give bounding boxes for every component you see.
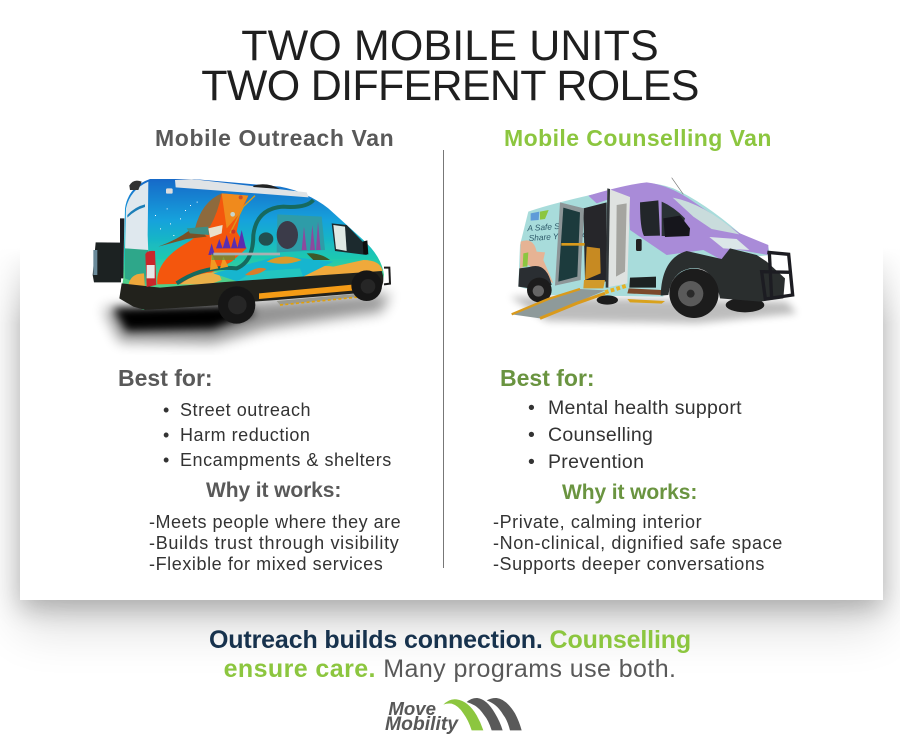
bull bar bbox=[384, 268, 390, 284]
purple wrap bbox=[588, 182, 768, 260]
column: outreach van details: • bbox=[163, 425, 170, 445]
open interior bbox=[583, 202, 607, 282]
sign text: Share Your Feelings bbox=[528, 228, 604, 243]
logo arcs bbox=[443, 698, 522, 730]
mid rail bbox=[213, 253, 280, 255]
door handle bbox=[636, 239, 642, 251]
best for heading: Best for: bbox=[118, 365, 213, 391]
antenna bbox=[672, 178, 683, 194]
why it works list bbox=[149, 512, 401, 574]
bottom summary: ensure care. Many programs use both. bbox=[224, 654, 676, 682]
heading: counselling van: Mobile Counselling Van bbox=[504, 125, 772, 151]
stars bbox=[155, 202, 198, 236]
windscreen bbox=[673, 198, 739, 234]
right open door bbox=[606, 188, 630, 288]
column: outreach van details bbox=[118, 365, 401, 574]
why it works heading: Why it works: bbox=[562, 481, 697, 504]
title: TWO DIFFERENT ROLES bbox=[201, 62, 699, 110]
title: TWO MOBILE UNITS bbox=[241, 22, 659, 70]
mirror bbox=[663, 216, 690, 237]
serpent bbox=[177, 200, 313, 283]
column: counselling van details: • bbox=[528, 397, 535, 419]
best for list: Counselling bbox=[548, 424, 653, 446]
column: outreach van details: • bbox=[163, 400, 170, 420]
logo wordmark: Move bbox=[388, 698, 436, 719]
why it works list bbox=[493, 512, 783, 574]
far wheels bbox=[597, 295, 618, 305]
branch bbox=[230, 196, 255, 233]
best for list: Prevention bbox=[548, 451, 644, 473]
tail light bbox=[145, 251, 156, 287]
best for list: Street outreach bbox=[180, 400, 311, 420]
why it works list: -Meets people where they are bbox=[149, 512, 401, 532]
cab window bbox=[332, 223, 367, 255]
best for list bbox=[528, 397, 742, 473]
bottom summary: Outreach builds connection. Counselling bbox=[209, 626, 691, 654]
best for heading: Best for: bbox=[500, 365, 595, 391]
why it works list: -Flexible for mixed services bbox=[149, 554, 383, 574]
orange stripe bbox=[259, 284, 355, 299]
people mural bbox=[520, 240, 553, 283]
sign text: A Safe Space bbox=[526, 220, 578, 233]
ramp bbox=[512, 289, 605, 318]
trees bbox=[208, 230, 246, 255]
side window with bear bbox=[277, 214, 325, 252]
best for list: Encampments & shelters bbox=[180, 450, 392, 470]
lower black body bbox=[119, 271, 383, 310]
front wheel bbox=[669, 269, 719, 318]
wheels bbox=[218, 286, 255, 324]
sand bbox=[180, 272, 222, 284]
rear spare box bbox=[93, 242, 122, 282]
logo wordmark bbox=[385, 698, 459, 735]
van body bbox=[518, 183, 770, 297]
best for list: Mental health support bbox=[548, 397, 742, 419]
front bumper and arch bbox=[661, 248, 785, 302]
illustration: counselling van bbox=[511, 178, 798, 328]
column: counselling van details: • bbox=[528, 424, 535, 446]
bull bar bbox=[762, 252, 793, 299]
why it works list: -Non-clinical, dignified safe space bbox=[493, 533, 783, 553]
background card with shadow bbox=[20, 150, 883, 600]
sill bbox=[627, 288, 662, 295]
van body bbox=[120, 179, 384, 310]
why it works list: -Supports deeper conversations bbox=[493, 554, 765, 574]
column: counselling van details bbox=[493, 365, 783, 574]
eagle bbox=[158, 230, 207, 247]
divider between columns bbox=[443, 150, 444, 568]
illustration: outreach van bbox=[92, 179, 395, 352]
why it works heading: Why it works: bbox=[206, 479, 341, 502]
sign text bbox=[526, 218, 604, 243]
bottom summary bbox=[209, 626, 691, 682]
column: outreach van details: • bbox=[163, 450, 170, 470]
logo: Move Mobility bbox=[385, 698, 522, 735]
roof awning bbox=[175, 179, 309, 197]
fish bbox=[267, 257, 302, 264]
why it works list: -Private, calming interior bbox=[493, 512, 702, 532]
orange mural bbox=[157, 193, 248, 284]
title bbox=[201, 22, 699, 110]
logo wordmark: Mobility bbox=[385, 714, 459, 735]
why it works list: -Builds trust through visibility bbox=[149, 533, 400, 553]
step bar bbox=[277, 293, 362, 305]
left open door bbox=[555, 202, 584, 286]
best for list bbox=[163, 400, 392, 470]
heading: outreach van: Mobile Outreach Van bbox=[155, 125, 394, 151]
best for list: Harm reduction bbox=[180, 425, 310, 445]
cab windows bbox=[640, 200, 660, 236]
column: counselling van details: • bbox=[528, 451, 535, 473]
rear windows bbox=[125, 182, 148, 253]
rear wheel arch and wheel bbox=[518, 266, 552, 288]
